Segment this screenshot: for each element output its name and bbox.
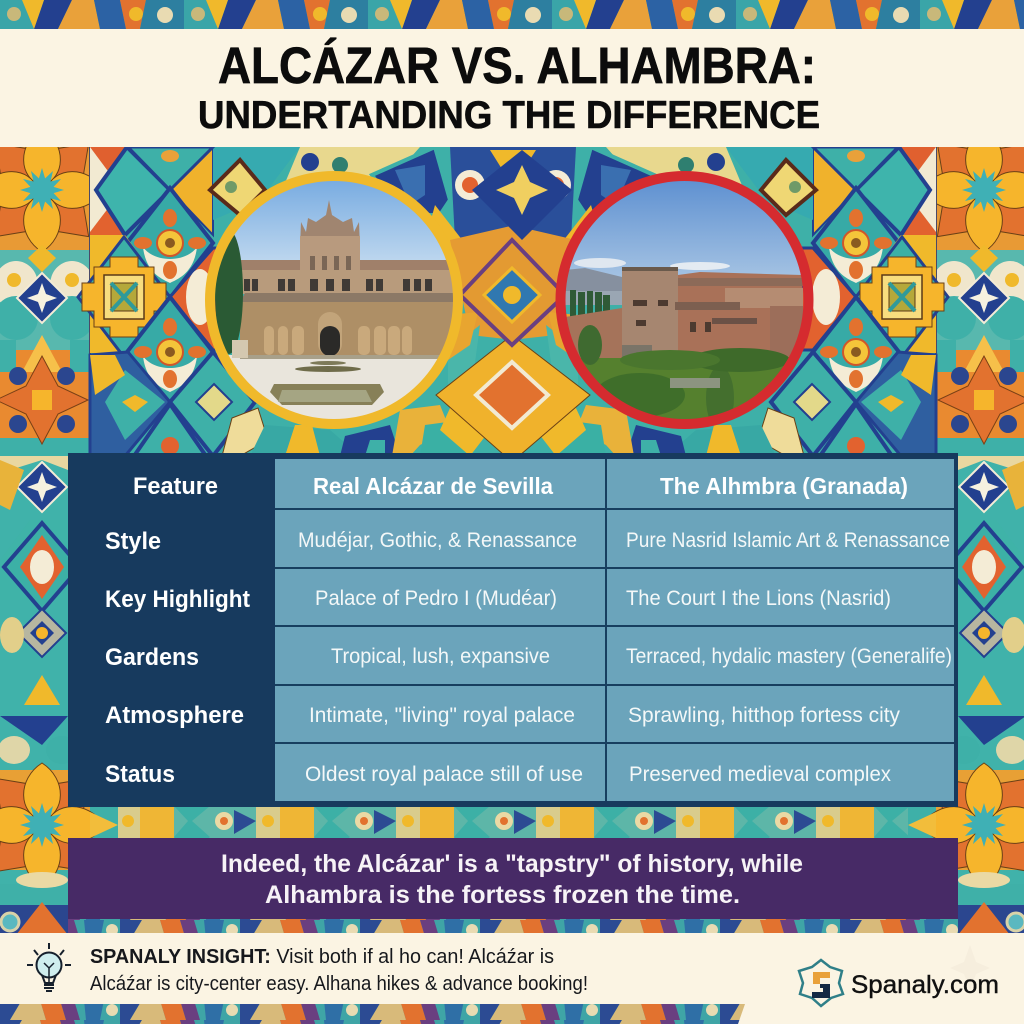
The Alhambra column: Sprawling, hitthop fortess city [628,704,900,727]
The Alhambra column: The Alhmbra (Granada) [660,473,908,499]
bottom mosaic strip [0,1004,745,1024]
photo: Real Alcázar courtyard [215,181,453,419]
comparison table [68,453,958,807]
insight text: Alcáźar is city-center easy. Alhana hikes & advance booking! [90,973,588,995]
feature column: Gardens [105,644,199,671]
feature column: Key Highlight [105,586,250,613]
icon: light bulb [27,943,71,991]
Real Alcázar column: Real Alcázar de Sevilla [313,473,553,499]
feature column [105,473,250,788]
The Alhambra column: Terraced, hydalic mastery (Generalife) [626,645,952,668]
title banner [0,29,1024,147]
feature column: Feature [133,473,218,500]
insight text [90,946,588,995]
feature column: Status [105,761,175,788]
subtitle: UNDERTANDING THE DIFFERENCE [198,94,820,137]
title: ALCÁZAR VS. ALHAMBRA: [218,37,816,94]
photo: Alhambra fortress [566,181,803,419]
mosaic strip between table and quote [118,807,908,838]
purple quote banner: Alhambra is the fortess frozen the time. [265,881,740,909]
Real Alcázar column [298,473,583,786]
yellow ring [210,176,458,424]
The Alhambra column [626,473,952,786]
feature column: Atmosphere [105,702,244,729]
feature column: Style [105,528,161,555]
brand name: Spanaly.com [851,971,999,999]
Real Alcázar column: Intimate, "living" royal palace [309,704,575,727]
The Alhambra column: The Court I the Lions (Nasrid) [626,587,891,610]
purple quote banner [68,838,958,919]
mosaic strip under quote [68,919,958,935]
icon: Spanaly logo [799,960,843,1006]
background mosaic [0,128,1024,938]
insight footer panel [0,933,1024,1024]
The Alhambra column: Preserved medieval complex [629,763,891,786]
Real Alcázar column: Palace of Pedro I (Mudéar) [315,587,557,610]
top mosaic strip [0,0,1024,29]
red ring [560,176,808,424]
Real Alcázar column: Tropical, lush, expansive [331,645,550,668]
insight text: SPANALY INSIGHT: Visit both if al ho can! Alcáźar is [90,946,554,968]
The Alhambra column: Pure Nasrid Islamic Art & Renassance [626,529,950,552]
Real Alcázar column: Oldest royal palace still of use [305,763,583,786]
Real Alcázar column: Mudéjar, Gothic, & Renassance [298,529,577,552]
purple quote banner: Indeed, the Alcázar' is a "tapstry" of history, while [221,850,803,878]
